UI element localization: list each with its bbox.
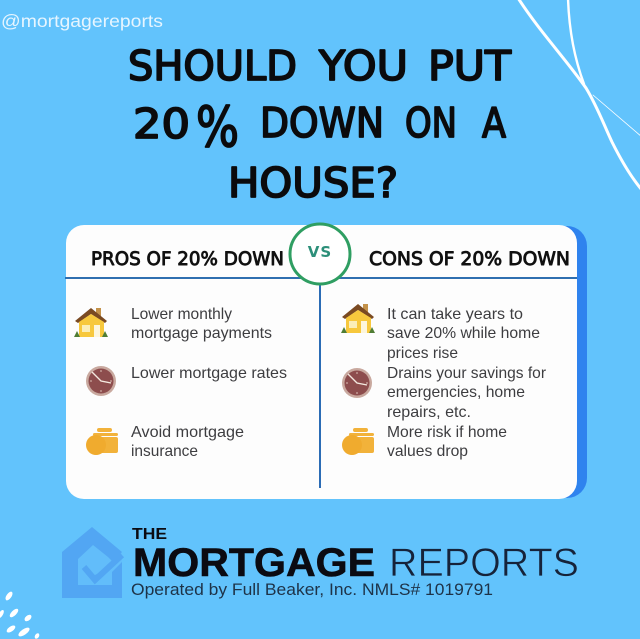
text: cons item 1: prices rise [387, 345, 458, 362]
text: pros item 1 [131, 306, 272, 342]
vs badge: VS [308, 243, 332, 261]
title: HOUSE? [228, 159, 398, 207]
title: YOU [318, 42, 408, 90]
icon: logo house with check [62, 527, 122, 598]
vs badge [290, 224, 350, 284]
card body [66, 225, 577, 499]
card blue shadow [500, 226, 587, 498]
logo text: operated by: Operated by Full Beaker, Inc. NMLS# 1019791 [131, 581, 493, 599]
text: pros item 1: mortgage payments [131, 325, 272, 342]
cons heading: CONS OF 20% DOWN [369, 248, 570, 270]
logo text: reports: REPORTS [389, 541, 579, 585]
text: cons item 2 [387, 365, 547, 421]
text: pros item 1: Lower monthly [131, 306, 232, 323]
icon: clock (pros) [86, 366, 116, 396]
header rule [65, 277, 577, 279]
title [128, 42, 512, 207]
text: cons item 3: More risk if home [387, 424, 507, 441]
icon: house (pros) [74, 308, 108, 337]
title: % [196, 95, 239, 159]
text: pros item 3: Avoid mortgage [131, 424, 244, 441]
text: pros item 3: insurance [131, 443, 198, 460]
icon: coins (cons) [342, 428, 374, 455]
decorative white dots [0, 590, 40, 639]
icon: house (cons) [341, 304, 375, 333]
icon: coins (pros) [86, 428, 118, 455]
text: pros item 2: Lower mortgage rates [131, 365, 287, 382]
text: cons item 1: save 20% while home [387, 325, 540, 342]
pros heading: PROS OF 20% DOWN [91, 248, 284, 270]
icon: clock (cons) [342, 368, 372, 398]
logo text: the: THE [132, 526, 167, 543]
handle: @mortgagereports [1, 11, 163, 31]
logo [62, 526, 579, 599]
title: 20 [133, 100, 190, 148]
text: cons item 1: It can take years to [387, 306, 523, 323]
title: DOWN [260, 99, 384, 147]
panel: comparison card [65, 224, 587, 499]
text: cons item 3 [387, 424, 507, 460]
title: PUT [428, 42, 512, 90]
text: cons item 2: Drains your savings for [387, 365, 547, 382]
title: A [482, 99, 506, 147]
center divider [319, 278, 321, 488]
text: cons item 3: values drop [387, 443, 468, 460]
text: pros item 3 [131, 424, 244, 460]
text: cons item 2: emergencies, home [387, 384, 525, 401]
title: ON [405, 99, 457, 147]
decorative white curves [518, 0, 640, 190]
logo text: mortgage: MORTGAGE [133, 541, 375, 585]
text: cons item 2: repairs, etc. [387, 404, 471, 421]
text: cons item 1 [387, 306, 540, 362]
title: SHOULD [128, 42, 297, 90]
